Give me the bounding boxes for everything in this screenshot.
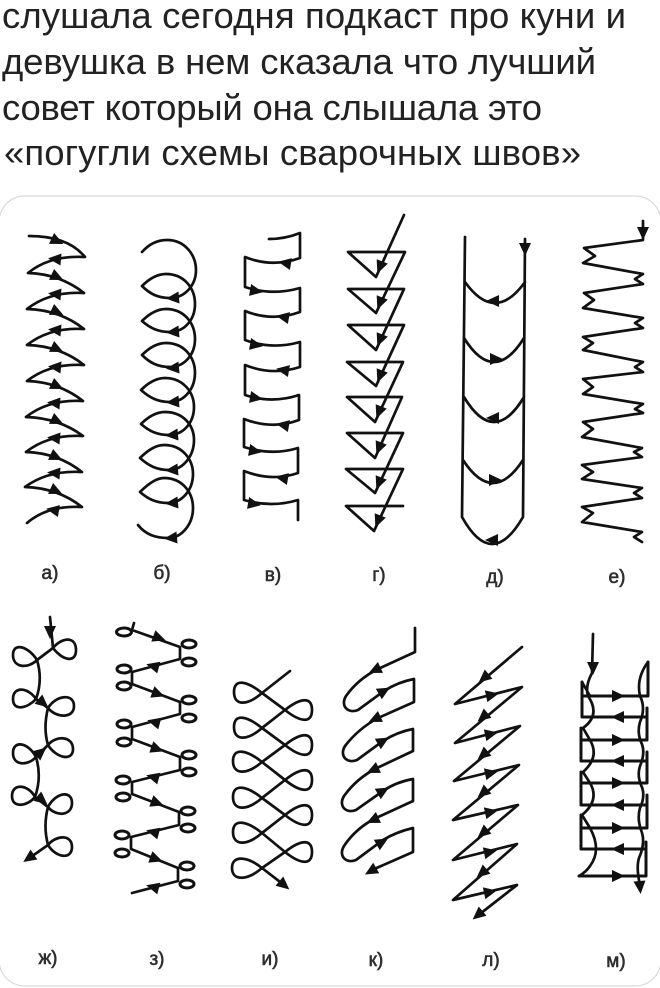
diagram д: arc seam between two rails: [462, 237, 531, 546]
label б: б): [153, 563, 171, 584]
title: «погугли схемы сварочных швов»: [4, 132, 581, 173]
label е: е): [609, 567, 625, 588]
diagram з: double-loop zigzag seam: [115, 623, 196, 894]
diagram л: lightning zigzag seam: [453, 647, 522, 924]
diagram к: hooked seam: [342, 628, 415, 880]
panel: weld seam diagrams: [0, 196, 660, 986]
label ж: ж): [38, 948, 58, 969]
diagram ж: looped seam: [12, 617, 76, 867]
diagram г: triangle seam: [346, 215, 405, 531]
label л: л): [482, 950, 500, 971]
label д: д): [486, 567, 504, 588]
diagram м: ladder seam: [579, 634, 648, 894]
title: совет который она слышала это: [2, 87, 542, 128]
title: [2, 0, 626, 173]
label з: з): [149, 949, 165, 970]
title: девушка в нем сказала что лучший: [2, 41, 596, 82]
diagram а: crescent zigzag seam: [25, 233, 85, 523]
diagram е: zigzag seam with notches: [582, 221, 649, 542]
diagram и: figure-eight seam: [232, 671, 312, 894]
diagram б: spiral seam: [138, 240, 196, 545]
label к: к): [369, 950, 383, 971]
diagram в: bracket seam: [244, 233, 300, 520]
label в: в): [265, 565, 281, 586]
label г: г): [372, 565, 386, 586]
label и: и): [262, 949, 278, 970]
label а: а): [42, 563, 58, 584]
label м: м): [606, 951, 626, 972]
